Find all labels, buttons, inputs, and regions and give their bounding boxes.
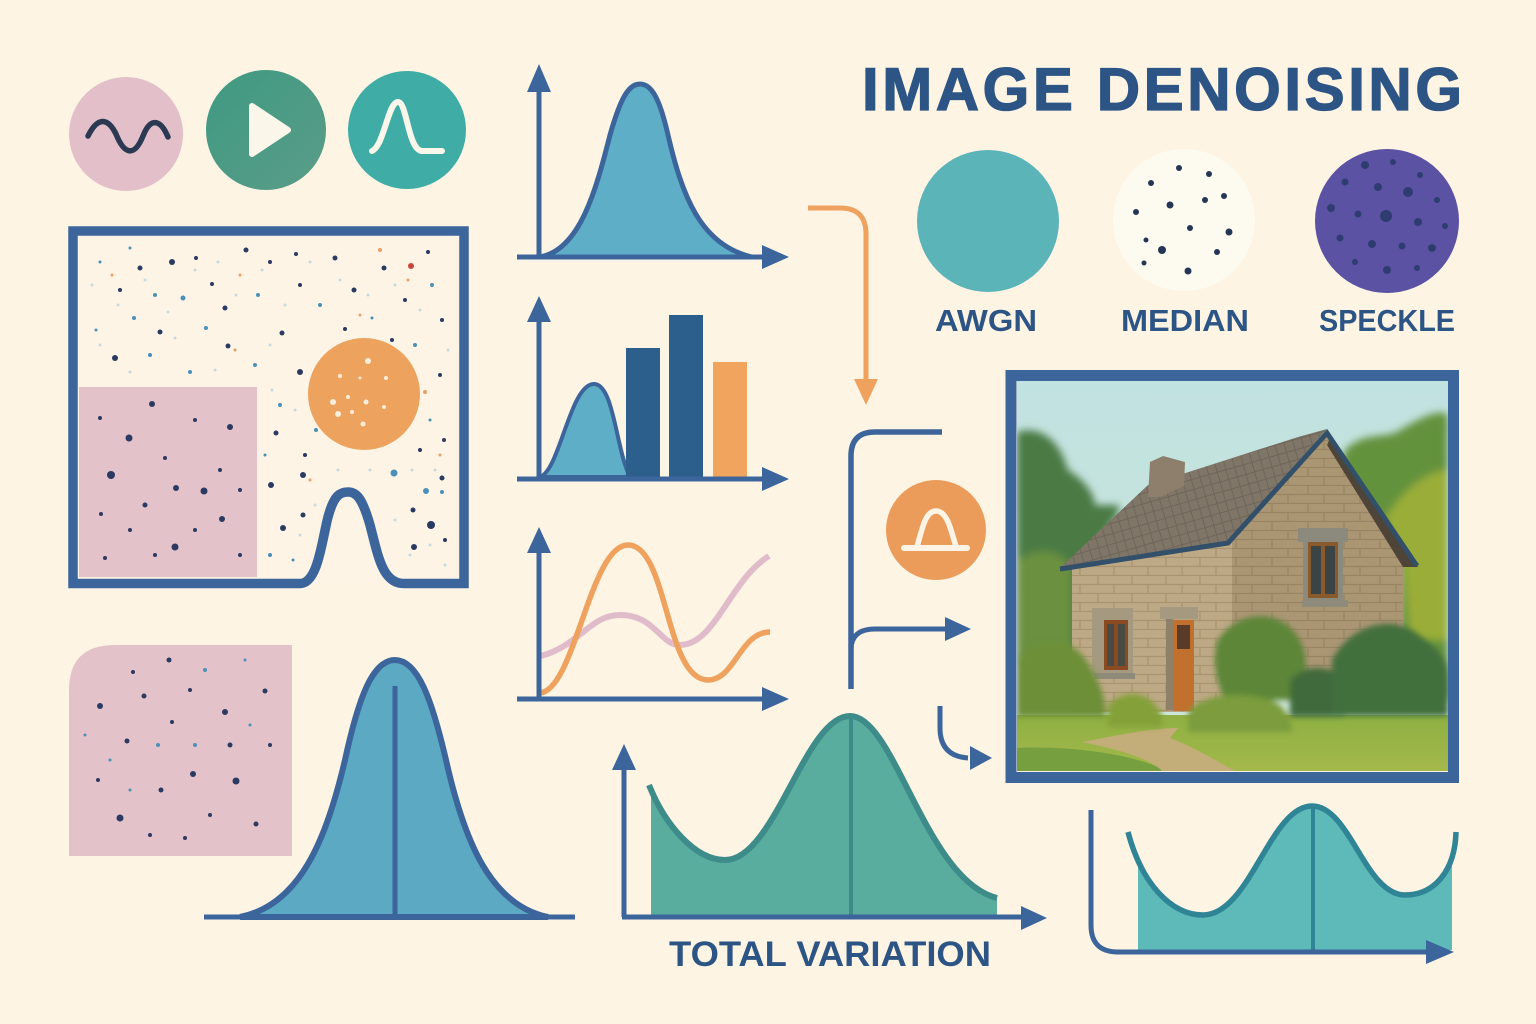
pink square inset bbox=[79, 387, 257, 577]
arrow: orange elbow bbox=[808, 208, 878, 405]
chart: small bell curve bbox=[517, 64, 789, 269]
chart: bottom right filtered curve bbox=[1091, 806, 1456, 964]
house bbox=[1060, 429, 1418, 712]
noise sample: speckle: SPECKLE bbox=[1319, 303, 1455, 338]
panel: pink noise swatch bbox=[69, 645, 292, 856]
frame bbox=[1011, 376, 1454, 778]
panel: denoised cottage photo bbox=[1011, 376, 1454, 778]
icon: orange bell bbox=[886, 480, 986, 580]
chart: total variation bbox=[612, 716, 1047, 930]
bushes bbox=[1017, 616, 1448, 732]
label: total variation: TOTAL VARIATION bbox=[669, 935, 991, 974]
panel: noisy image bbox=[73, 231, 464, 584]
scattered noise dots bbox=[90, 246, 450, 566]
dots on pink inset bbox=[98, 401, 242, 560]
chart: large bell curve bbox=[204, 660, 575, 917]
title: IMAGE DENOISING bbox=[862, 56, 1462, 123]
icon: green play bbox=[206, 70, 326, 190]
icon: teal peak bbox=[348, 71, 466, 189]
windows bbox=[1298, 528, 1348, 542]
chart: lines bbox=[517, 527, 789, 711]
icon: pink wave bbox=[69, 77, 183, 191]
trees bbox=[1017, 413, 1448, 700]
frame with bump bbox=[73, 231, 464, 584]
noise sample: AWGN: AWGN bbox=[935, 303, 1037, 338]
noise sample: median bbox=[1113, 149, 1255, 338]
noise sample: AWGN bbox=[917, 150, 1059, 338]
grass bbox=[1017, 715, 1448, 771]
arrow: blue branch bbox=[851, 432, 971, 689]
chart: bars with curve bbox=[517, 296, 789, 491]
noise sample: median: MEDIAN bbox=[1121, 303, 1249, 338]
noise sample: speckle bbox=[1315, 149, 1459, 338]
arrow: small curved bbox=[940, 706, 992, 770]
orange disc bbox=[308, 338, 420, 450]
